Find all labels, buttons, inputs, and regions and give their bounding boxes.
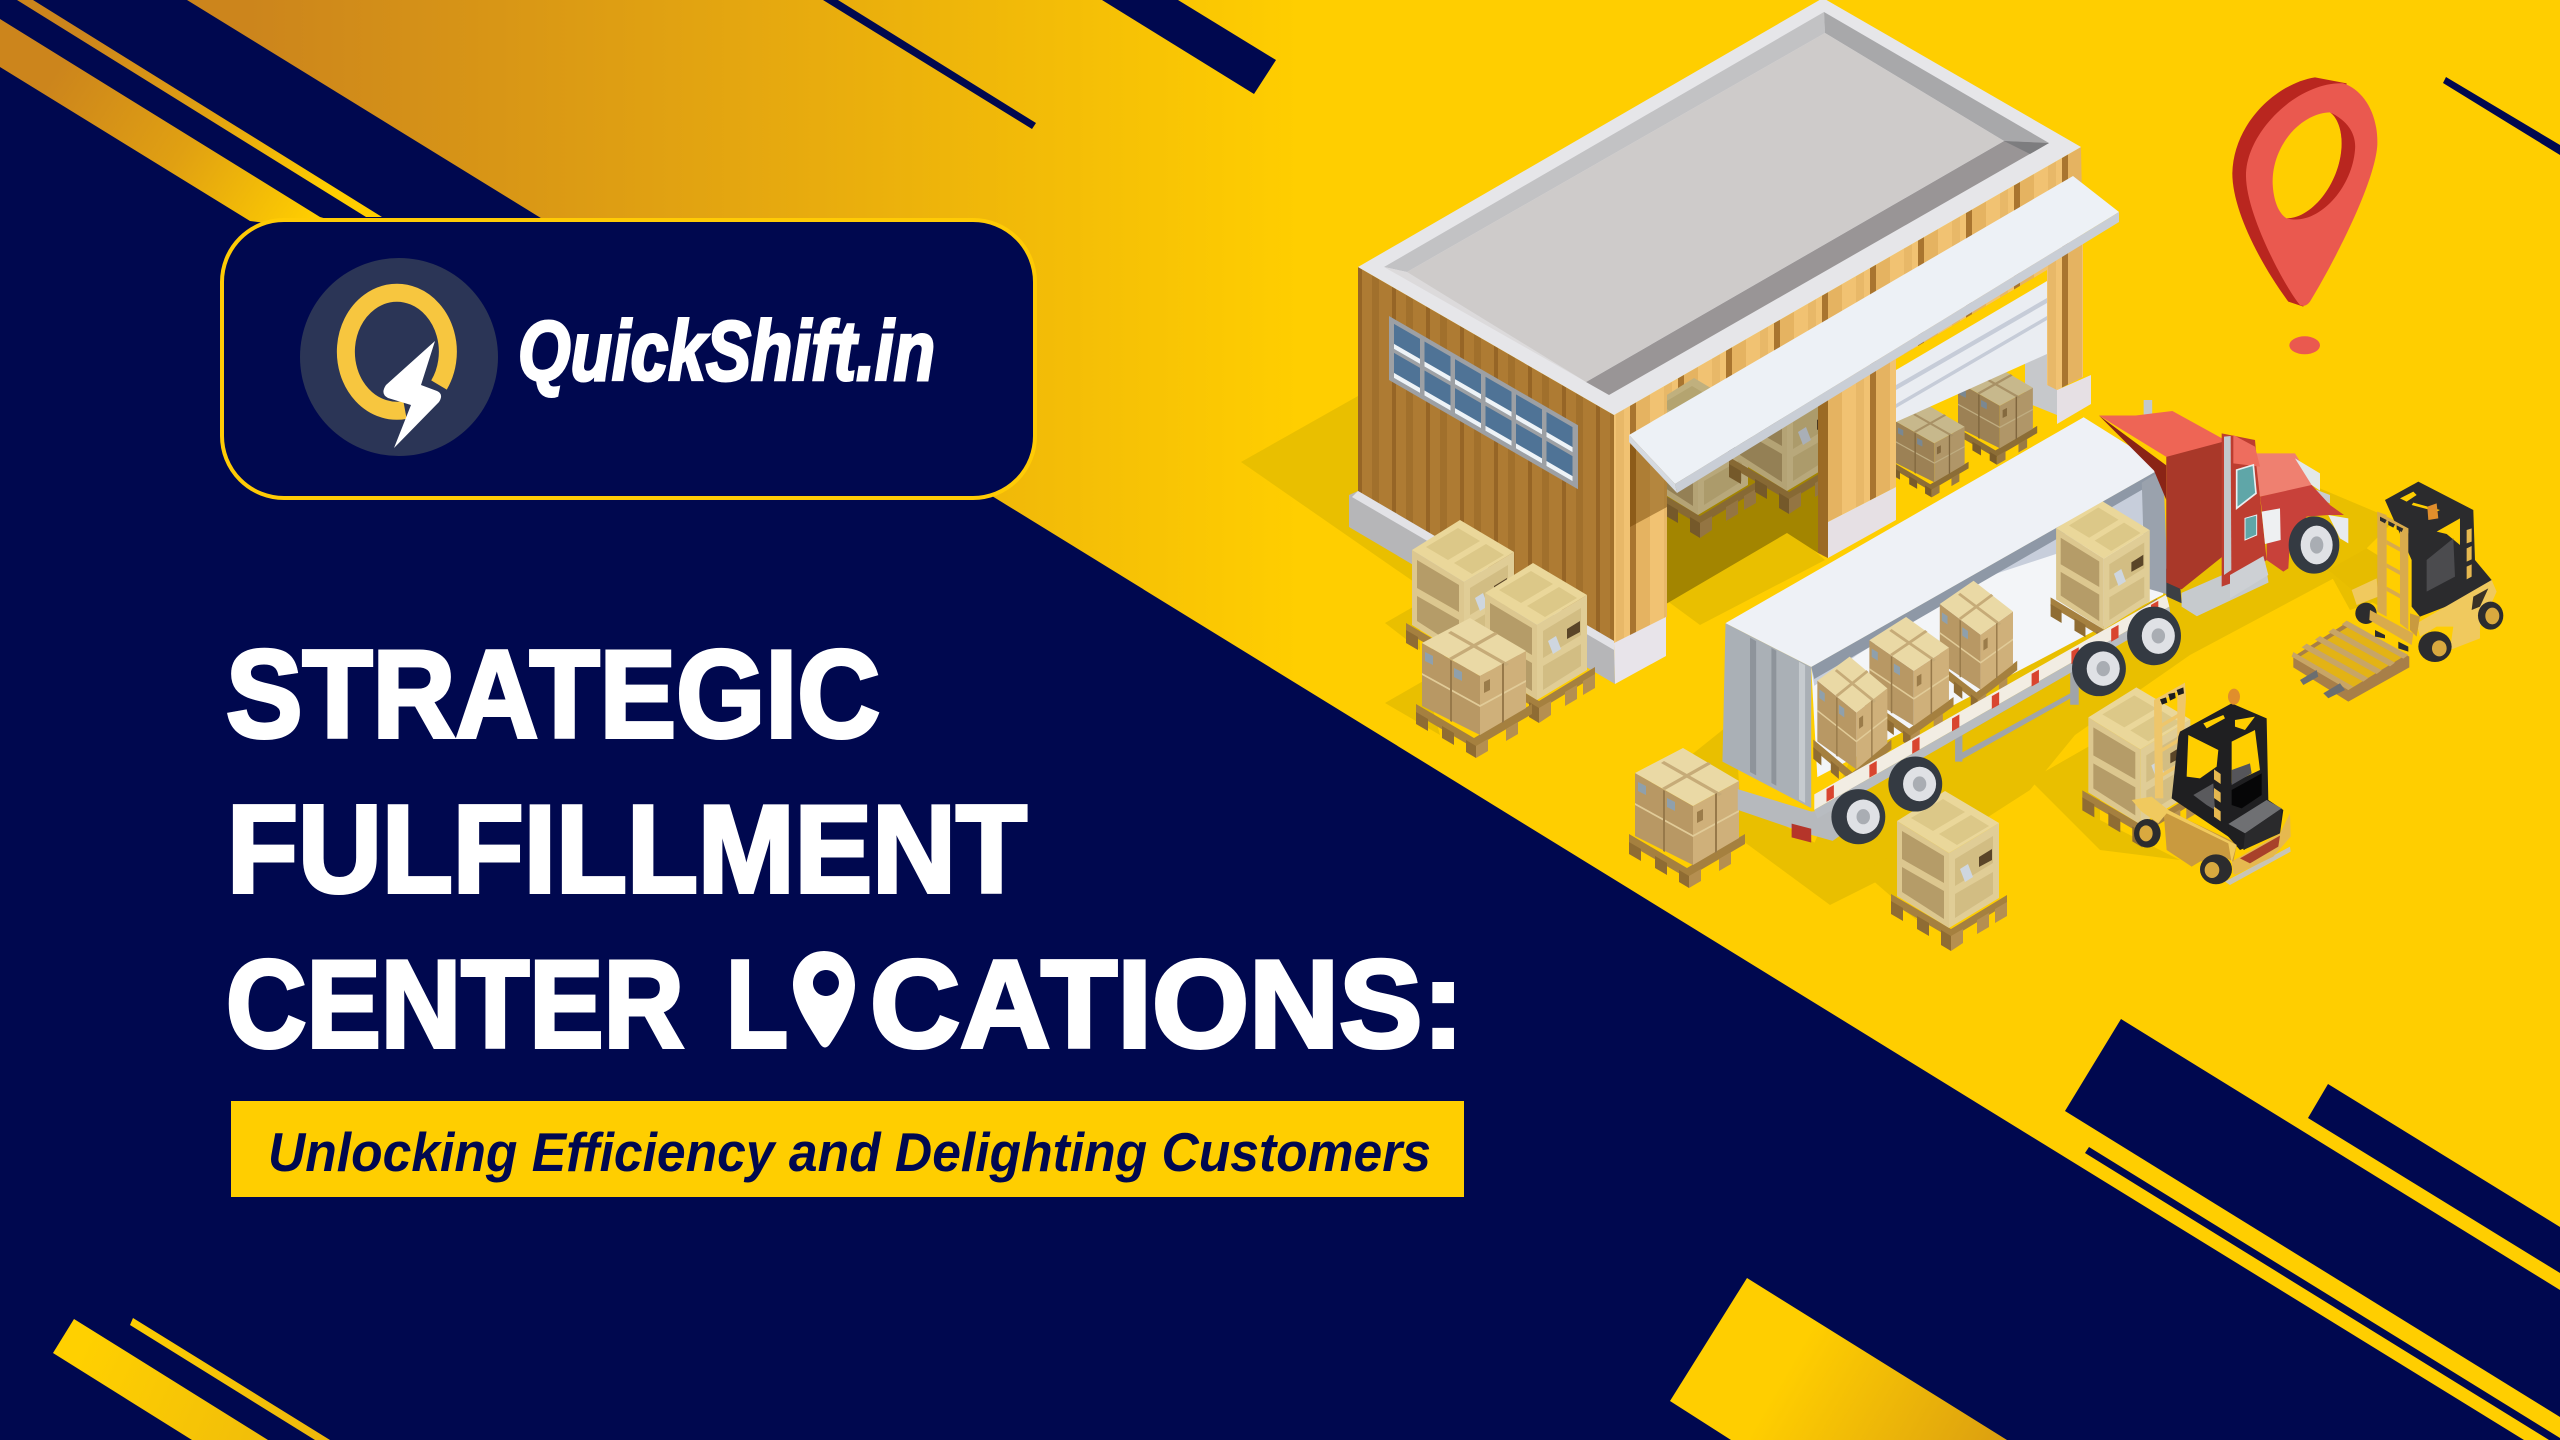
rear underbody <box>1738 789 1882 841</box>
title: STRATEGIC <box>226 626 880 764</box>
forklift: front carrying crate <box>2082 683 2291 885</box>
crates and boxes beside the warehouse <box>1406 520 1595 758</box>
mast <box>2154 683 2186 798</box>
map pin: red <box>2232 77 2377 354</box>
left wall with vertical planks <box>1358 267 1614 645</box>
cab rear <box>2099 400 2269 616</box>
trailer roof <box>1726 417 2163 667</box>
title: CENTER <box>226 936 684 1074</box>
column left <box>1614 385 1667 645</box>
box stacks on truck <box>1813 581 2017 792</box>
carried crate <box>2082 687 2198 847</box>
decorative stripes: top navy <box>823 0 2560 155</box>
cage <box>2172 703 2283 850</box>
logo wordmark: QuickShift.in <box>518 304 935 398</box>
dark loading bay floor <box>1666 400 1818 604</box>
beacon <box>2228 689 2240 705</box>
pallet <box>2292 621 2409 702</box>
title <box>226 626 1464 1074</box>
forklift: right with empty pallet <box>2292 482 2503 702</box>
decorative stripes: top left <box>0 0 400 240</box>
warehouse building <box>1349 0 2119 684</box>
cab front <box>2222 433 2348 598</box>
side rail with reflectors <box>1814 595 2171 818</box>
crates in the left bay <box>1640 354 1845 538</box>
roof inner walls and deck <box>1384 12 1825 272</box>
wheels: trailer <box>1831 607 2181 844</box>
column middle <box>1818 359 1896 558</box>
decorative block: bottom right yellow <box>1670 1278 2007 1440</box>
roof outer parapet <box>1358 0 2081 415</box>
decorative stripes: bottom right navy <box>2065 1019 2560 1440</box>
logo icon <box>300 258 498 456</box>
crate pallet: front of truck <box>1891 791 2007 951</box>
subtitle bar: Unlocking Efficiency and Delighting Customers <box>268 1121 1431 1183</box>
column right <box>2047 250 2083 390</box>
subtitle bar <box>231 1101 1464 1197</box>
box pallet: bottom left <box>1629 748 1745 888</box>
logo panel <box>222 220 1035 498</box>
decorative stripes: bottom left yellow <box>53 1318 330 1440</box>
boxes in the right bay <box>1892 335 2057 497</box>
title: O <box>793 975 855 1064</box>
truck <box>1722 400 2269 844</box>
front wall band <box>1614 147 2083 645</box>
cab wheel <box>2289 516 2339 574</box>
side guard <box>1955 662 2079 762</box>
awning <box>1629 176 2119 484</box>
rear left wheel <box>2134 819 2161 848</box>
cargo interior <box>1811 467 2168 777</box>
rear door <box>1722 623 1811 808</box>
icon: title location pin <box>793 951 855 1048</box>
title: FULFILLMENT <box>227 781 1027 919</box>
wheels <box>2418 602 2503 662</box>
ground shadows <box>1241 396 2395 930</box>
title: CATIONS: <box>870 936 1464 1074</box>
rear block <box>2228 800 2282 833</box>
roller door <box>1896 281 2047 422</box>
mast <box>2369 512 2413 645</box>
title: L <box>726 936 788 1074</box>
concrete base: left <box>1349 491 1615 684</box>
crate on truck <box>2051 500 2157 651</box>
window band <box>1389 316 1578 489</box>
body <box>2225 847 2291 885</box>
